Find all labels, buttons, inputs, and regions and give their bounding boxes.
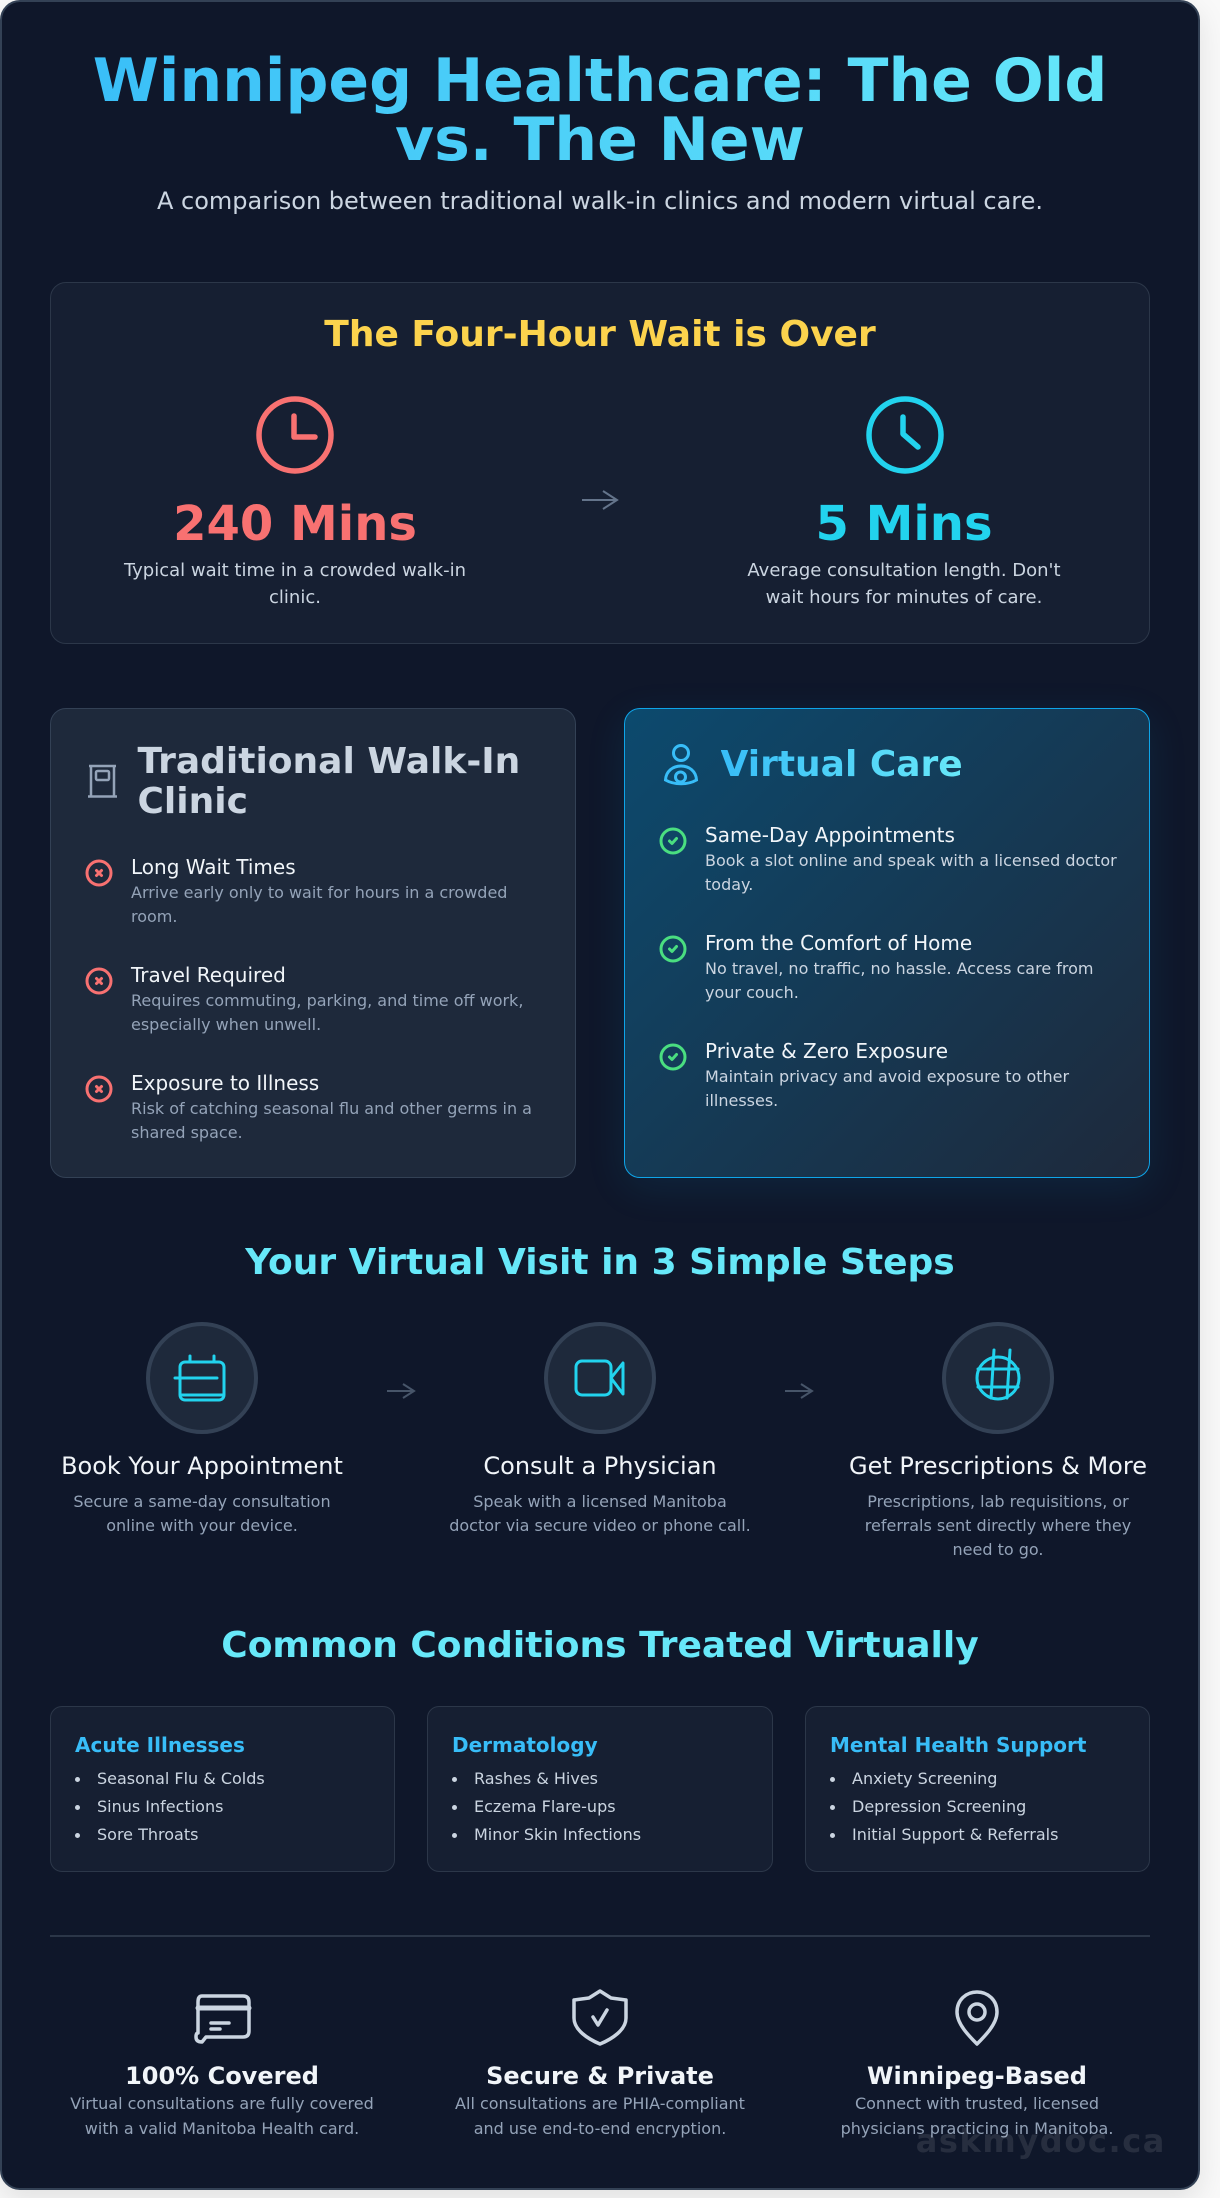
heading: traditional walk-in clinic: Traditional Walk-In <box>138 741 520 782</box>
item text: comfort of home: No travel, no traffic, no hassle. Access care from <box>705 959 1093 978</box>
text: walk-in wait description: clinic. <box>269 587 321 608</box>
item text: private and zero exposure: illnesses. <box>705 1091 778 1110</box>
title: vs. The New <box>395 105 805 175</box>
panel: four-hour wait <box>50 282 1150 644</box>
item text: travel required <box>131 991 523 1034</box>
footer title: winnipeg-based: Winnipeg-Based <box>867 2062 1087 2090</box>
list: acute illnesses: Sinus Infections <box>97 1797 223 1816</box>
text: consultation description: wait hours for minutes of care. <box>766 587 1042 608</box>
heading: four-hour wait: The Four-Hour Wait is Over <box>324 314 876 355</box>
item text: same-day appointments <box>705 851 1117 894</box>
list: dermatology: Minor Skin Infections <box>474 1825 641 1844</box>
footer text: winnipeg-based: physicians practicing in Manitoba. <box>841 2118 1113 2138</box>
panel: virtual care <box>624 708 1150 1178</box>
title <box>50 52 1150 170</box>
arrow: step 2 to 3 <box>785 1383 814 1399</box>
arrow: wait to consult <box>582 490 619 510</box>
icon: map pin <box>955 1990 999 2046</box>
item text: travel required: especially when unwell. <box>131 1015 321 1034</box>
item heading: private and zero exposure: Private & Zero Exposure <box>705 1039 948 1063</box>
footer text: covered: with a valid Manitoba Health card. <box>85 2118 359 2138</box>
footer text: secure: All consultations are PHIA-compliant <box>455 2094 745 2113</box>
icon: check 2 <box>660 936 686 962</box>
item text: long wait times: Arrive early only to wait for hours in a crowded <box>131 883 507 902</box>
item text: travel required: Requires commuting, parking, and time off work, <box>131 991 523 1010</box>
footer text: winnipeg-based: Connect with trusted, licensed <box>855 2094 1099 2113</box>
step text 2 <box>449 1492 751 1535</box>
list: dermatology: Rashes & Hives <box>474 1769 598 1788</box>
card title: mental health support: Mental Health Support <box>830 1733 1086 1757</box>
list: mental health support <box>830 1769 1058 1844</box>
step text 1 <box>73 1492 331 1535</box>
list: mental health support: Anxiety Screening <box>852 1769 997 1788</box>
stat: 240 mins: 240 Mins <box>173 496 417 552</box>
item text: long wait times <box>131 883 507 926</box>
footer text: winnipeg-based <box>841 2094 1113 2138</box>
panel: traditional walk-in clinic <box>50 708 576 1178</box>
item text: private and zero exposure: Maintain privacy and avoid exposure to other <box>705 1067 1069 1086</box>
title: Winnipeg Healthcare: The Old <box>93 46 1107 116</box>
panel: acute illnesses <box>50 1706 395 1872</box>
list: mental health support: Depression Screening <box>852 1797 1026 1816</box>
icon: red clock <box>256 396 334 474</box>
heading: traditional walk-in clinic: Clinic <box>138 781 248 822</box>
list: acute illnesses <box>75 1769 265 1844</box>
icon: x mark 3 <box>86 1076 112 1102</box>
step text 3: referrals sent directly where they <box>865 1516 1131 1535</box>
icon: check 3 <box>660 1044 686 1070</box>
item text: exposure to illness: Risk of catching seasonal flu and other germs in a <box>131 1099 532 1118</box>
icon: step 2 video <box>544 1322 656 1434</box>
list: acute illnesses: Seasonal Flu & Colds <box>97 1769 265 1788</box>
icon: x mark 2 <box>86 968 112 994</box>
item text: private and zero exposure <box>705 1067 1070 1110</box>
step text 1: online with your device. <box>106 1516 298 1535</box>
item text: long wait times: room. <box>131 907 177 926</box>
heading: virtual care: Virtual Care <box>720 744 963 785</box>
heading: common conditions: Common Conditions Treated Virtually <box>221 1625 979 1666</box>
footer text: secure <box>455 2094 745 2138</box>
icon: step 1 calendar <box>146 1322 258 1434</box>
text: walk-in wait description: Typical wait time in a crowded walk-in <box>124 560 466 581</box>
list: mental health support: Initial Support & Referrals <box>852 1825 1058 1844</box>
icon: shield <box>572 1989 628 2046</box>
text: consultation description: Average consultation length. Don't <box>747 560 1061 581</box>
footer title: secure: Secure & Private <box>486 2062 714 2090</box>
arrow: step 1 to 2 <box>387 1383 416 1399</box>
step text 3: Prescriptions, lab requisitions, or <box>867 1492 1129 1511</box>
icon: step 3 globe <box>942 1322 1054 1434</box>
step text 3 <box>865 1492 1131 1559</box>
text: walk-in wait description <box>124 560 466 608</box>
step title 3: Get Prescriptions & More <box>849 1452 1147 1480</box>
item text: same-day appointments: today. <box>705 875 753 894</box>
footer text: covered: Virtual consultations are fully covered <box>70 2094 374 2113</box>
item text: comfort of home: your couch. <box>705 983 799 1002</box>
step text 2: Speak with a licensed Manitoba <box>473 1492 727 1511</box>
card title: acute illnesses: Acute Illnesses <box>75 1733 245 1757</box>
step text 2: doctor via secure video or phone call. <box>449 1516 751 1535</box>
step text 3: need to go. <box>953 1540 1043 1559</box>
item text: exposure to illness <box>131 1099 532 1142</box>
text: consultation description <box>747 560 1061 608</box>
list: dermatology <box>452 1769 641 1844</box>
icon: cyan clock <box>866 396 944 474</box>
footer text: covered <box>70 2094 374 2138</box>
watermark: askmydoc.ca <box>916 2122 1166 2160</box>
list: acute illnesses: Sore Throats <box>97 1825 198 1844</box>
icon: door <box>88 764 117 798</box>
footer title: covered: 100% Covered <box>125 2062 319 2090</box>
list: dermatology: Eczema Flare-ups <box>474 1797 616 1816</box>
step title 1: Book Your Appointment <box>61 1452 343 1480</box>
item heading: comfort of home: From the Comfort of Home <box>705 931 972 955</box>
item heading: same-day appointments: Same-Day Appointments <box>705 823 955 847</box>
footer text: secure: and use end-to-end encryption. <box>474 2118 726 2138</box>
icon: health card <box>194 1994 252 2044</box>
panel: mental health support <box>805 1706 1150 1872</box>
step text 1: Secure a same-day consultation <box>73 1492 331 1511</box>
item text: exposure to illness: shared space. <box>131 1123 243 1142</box>
item heading: long wait times: Long Wait Times <box>131 855 296 879</box>
icon: check 1 <box>660 828 686 854</box>
item text: same-day appointments: Book a slot online and speak with a licensed doctor <box>705 851 1117 870</box>
heading: 3 simple steps: Your Virtual Visit in 3 Simple Steps <box>245 1242 955 1282</box>
item heading: travel required: Travel Required <box>131 963 286 987</box>
step title 2: Consult a Physician <box>483 1452 717 1480</box>
stat: 5 mins: 5 Mins <box>815 496 993 552</box>
subtitle: A comparison between traditional walk-in clinics and modern virtual care. <box>157 187 1043 215</box>
icon: person <box>664 744 698 786</box>
heading: traditional walk-in clinic <box>138 741 520 822</box>
panel: dermatology <box>427 1706 773 1872</box>
item heading: exposure to illness: Exposure to Illness <box>131 1071 319 1095</box>
icon: x mark 1 <box>86 860 112 886</box>
item text: comfort of home <box>705 959 1093 1002</box>
card title: dermatology: Dermatology <box>452 1733 598 1757</box>
